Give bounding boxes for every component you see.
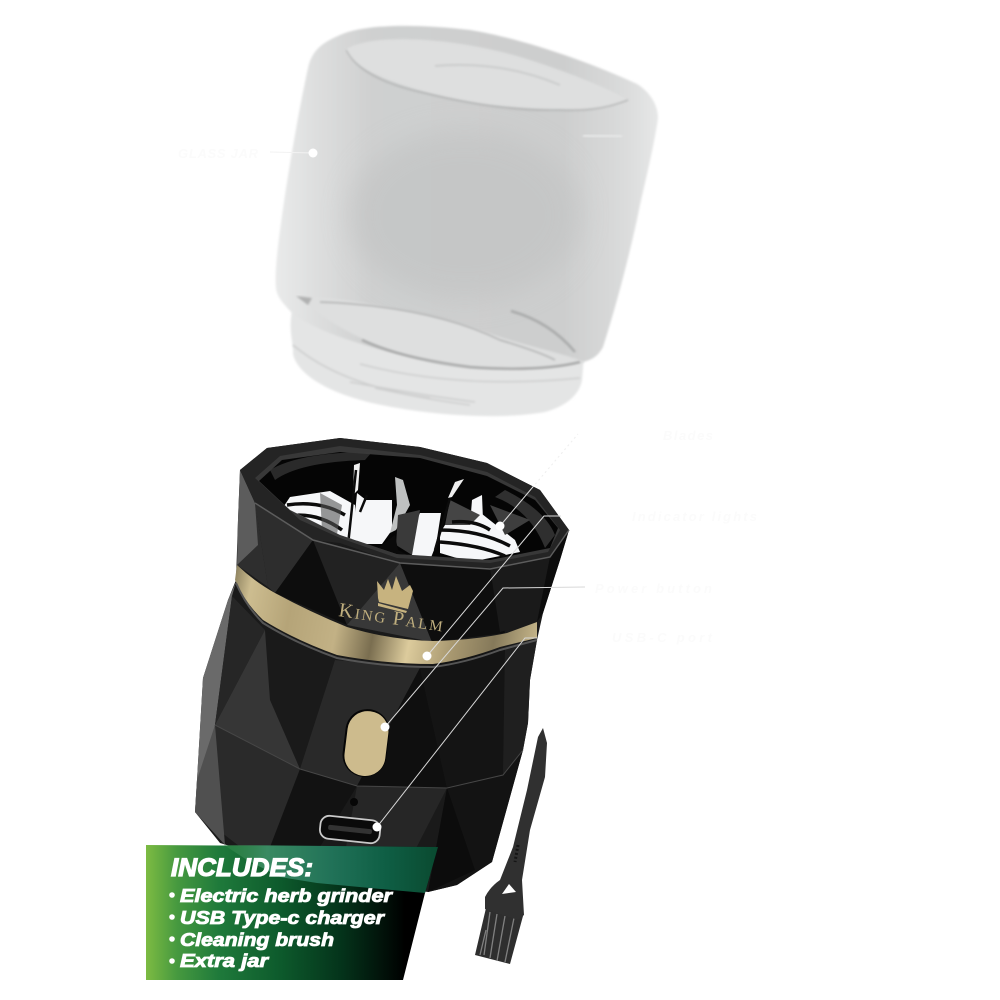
body silhouette (195, 438, 569, 892)
brush handle (485, 728, 547, 920)
rim top (240, 438, 569, 569)
jar mouth (300, 296, 585, 370)
band shadow edge (236, 583, 537, 667)
cleaning brush (475, 728, 547, 964)
logo: wordmark: KING PALM (337, 599, 444, 636)
jar inner shading (350, 130, 580, 300)
panel background (146, 845, 438, 980)
gold band (235, 565, 537, 664)
logo: crown (377, 576, 413, 613)
charge light hole (350, 798, 358, 806)
includes list: USB Type-c charger (180, 908, 385, 928)
label: blades: Blades (663, 428, 713, 443)
jar threads (293, 345, 580, 405)
leader: USB port (372, 638, 537, 832)
panel overlap tint (224, 845, 438, 893)
brush bristles (475, 908, 523, 964)
label: glass jar: GLASS JAR (178, 146, 259, 161)
leader: glass jar (270, 148, 318, 158)
power button (340, 707, 392, 779)
label: USB port: USB-C port (612, 630, 713, 645)
glass jar (276, 26, 658, 416)
leader: blades (496, 434, 578, 530)
brush hole (502, 884, 516, 894)
leader: power button (380, 587, 585, 732)
includes panel (146, 845, 438, 980)
label: indicator lights: Indicator lights (632, 509, 757, 524)
grinder body (195, 438, 569, 892)
lower facets (195, 582, 537, 892)
upper facets (237, 470, 569, 642)
leader: indicator lights (422, 516, 561, 660)
jar neck (291, 310, 584, 416)
seam line (215, 725, 523, 788)
product diagram (146, 25, 658, 980)
label: power button: Power button (595, 581, 712, 596)
includes heading: INCLUDES: (171, 854, 313, 882)
USB-C port (319, 815, 381, 844)
jar top ellipse (345, 39, 628, 110)
includes list (169, 886, 393, 971)
jar body (276, 26, 658, 370)
includes list: Electric herb grinder (180, 886, 393, 906)
includes list: Cleaning brush (180, 930, 334, 950)
includes list: Extra jar (180, 951, 269, 971)
grinder blades (280, 463, 530, 562)
